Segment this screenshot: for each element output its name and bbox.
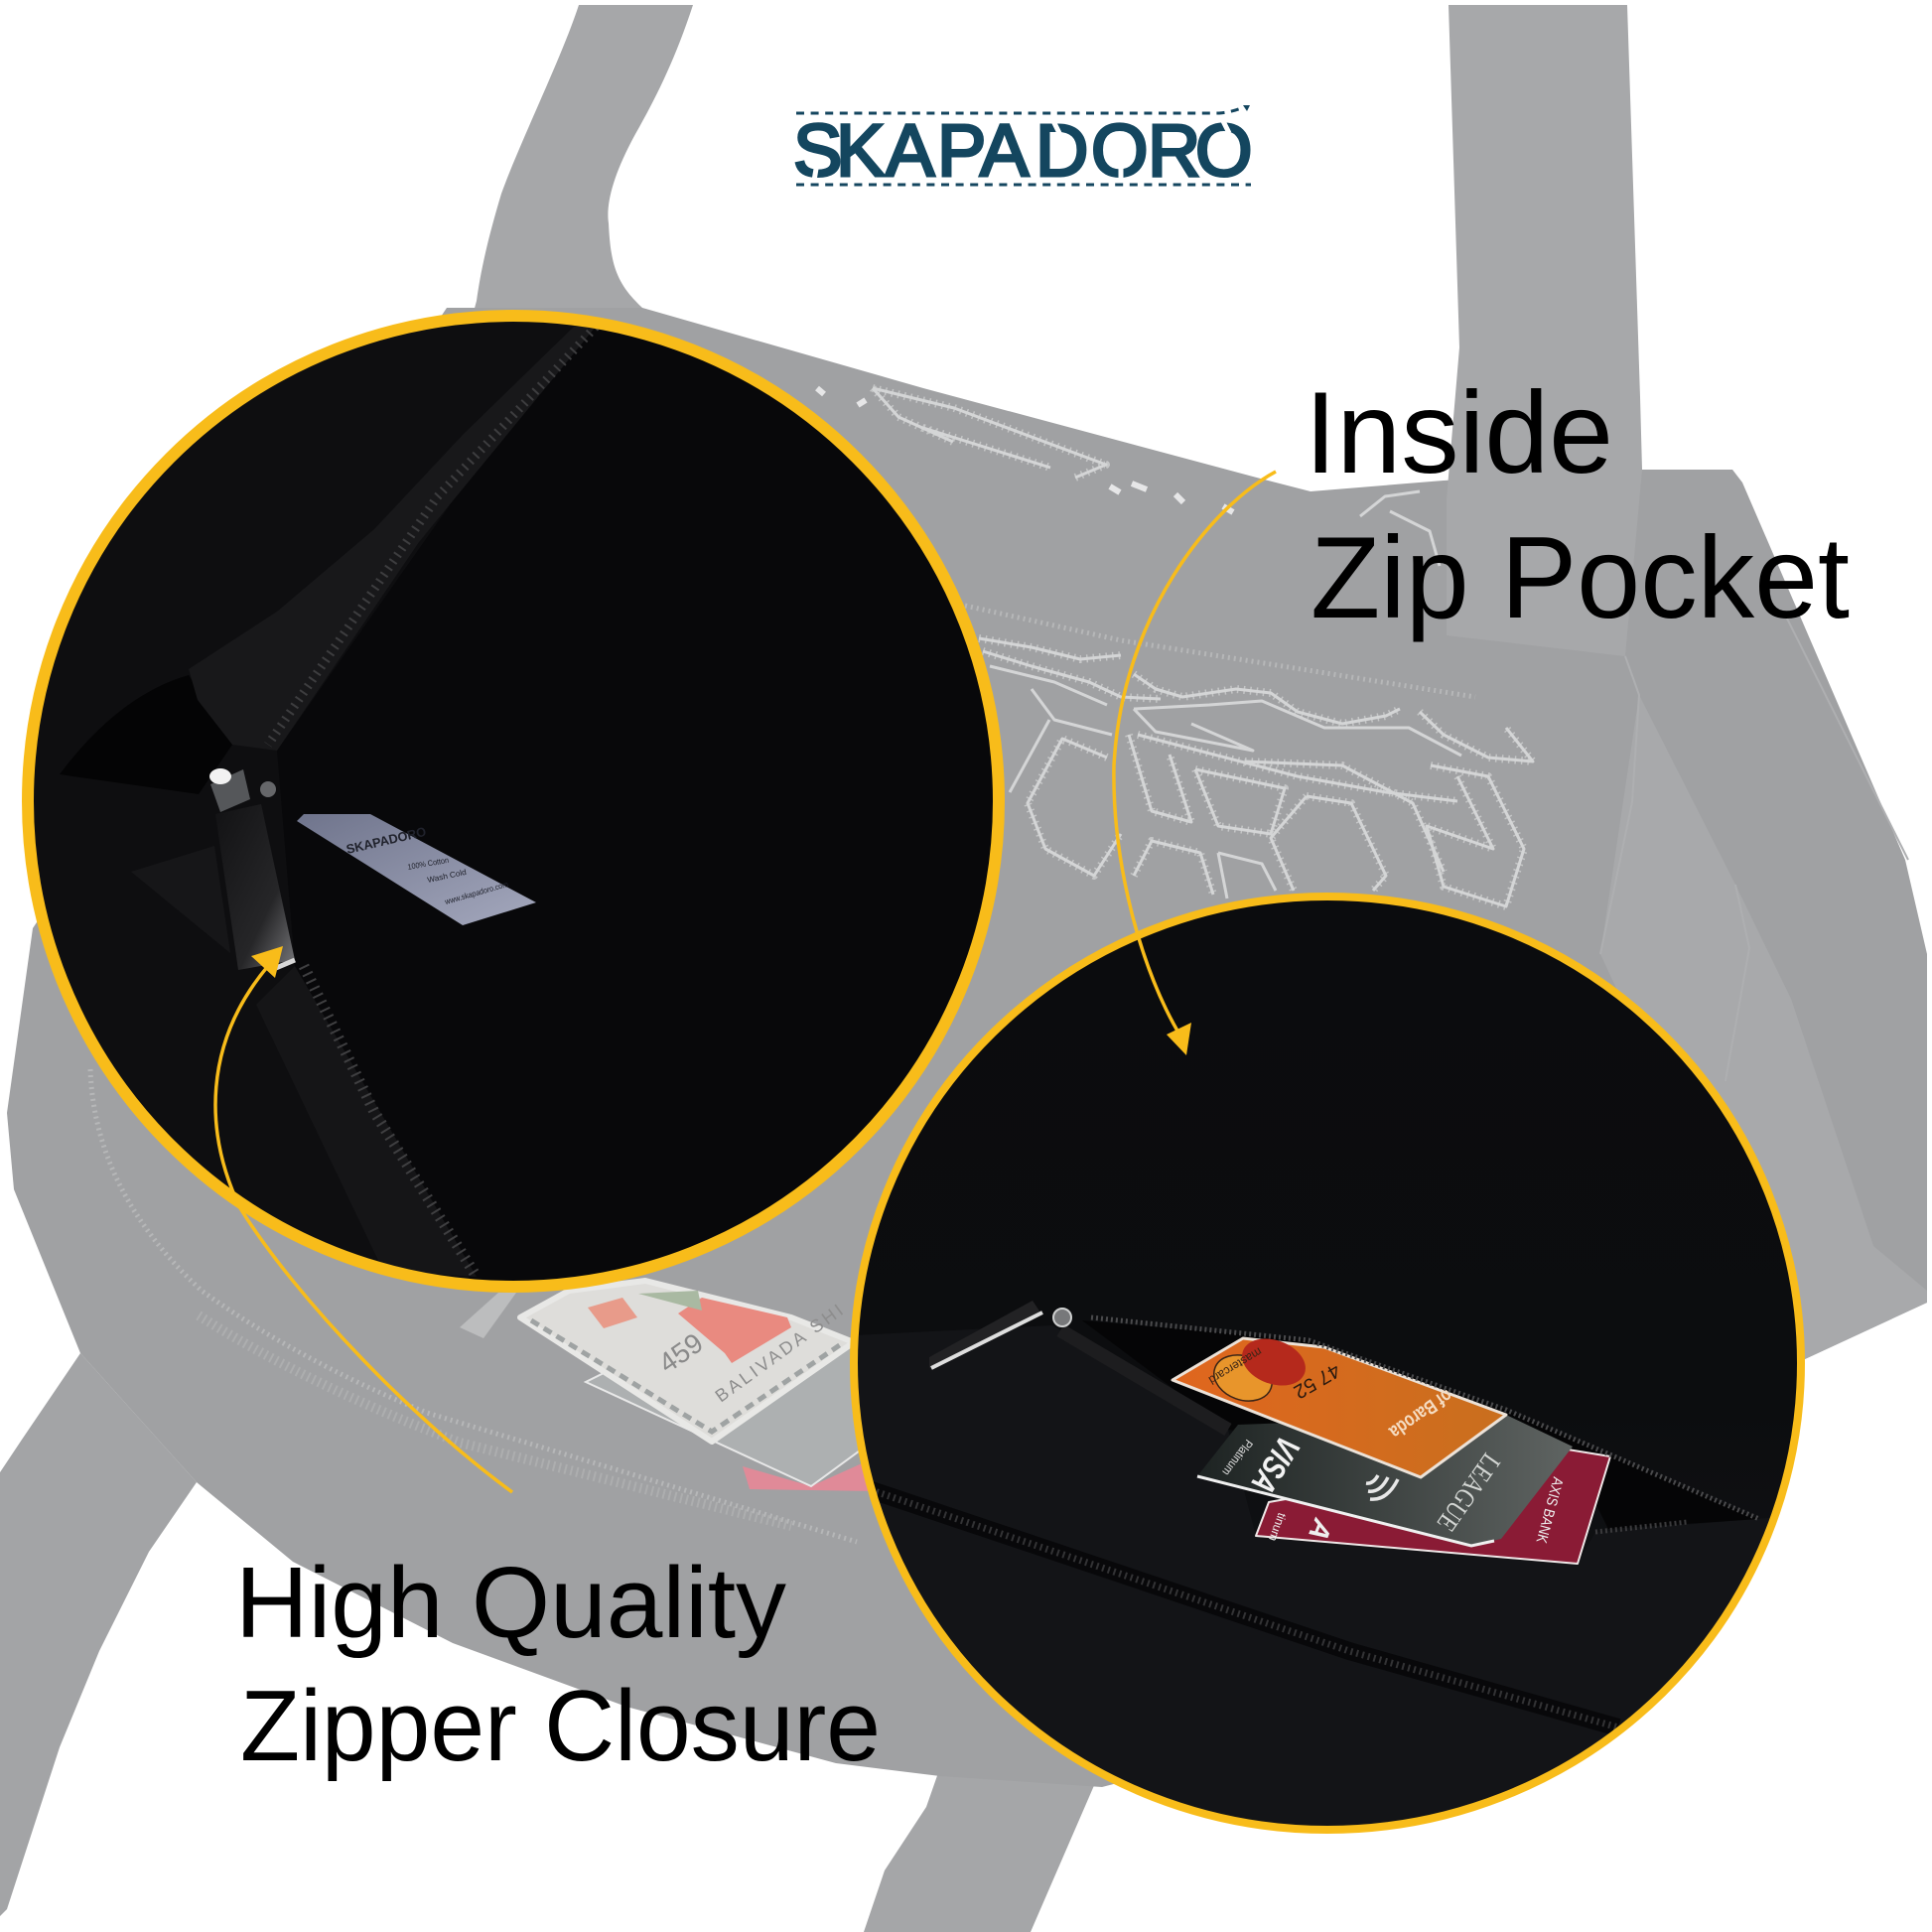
bank name: AXIS BANK — [1533, 1475, 1567, 1545]
top left strap — [467, 5, 693, 338]
lower zipper tape — [854, 1484, 1618, 1727]
lower pocket fabric — [858, 1326, 1168, 1404]
bag body — [7, 308, 1927, 1787]
mastercard orange circle — [1207, 1347, 1279, 1409]
pink card — [743, 1459, 874, 1491]
circle ring — [28, 316, 999, 1287]
zip puller — [215, 804, 295, 970]
card name: BALIVADA SHI — [712, 1299, 849, 1406]
slider shine — [209, 768, 231, 784]
right side panel — [1600, 695, 1927, 1359]
lower zipper teeth — [304, 966, 477, 1277]
bank name: of Baroda — [1385, 1384, 1456, 1444]
contactless icon — [1366, 1475, 1398, 1499]
upper zipper tape — [189, 327, 596, 751]
zipper slider — [209, 768, 276, 812]
card brand fragment: A — [1303, 1514, 1339, 1545]
card tier: Platinum — [1219, 1437, 1256, 1478]
stamp card — [520, 1281, 854, 1442]
bottom right strap — [864, 1767, 1102, 1932]
label wash text: Wash Cold — [427, 868, 468, 885]
fabric left of zipper — [20, 298, 596, 1291]
red card — [1256, 1449, 1610, 1564]
circle base — [28, 316, 999, 1287]
mastercard label: mastercard — [1206, 1344, 1265, 1387]
puller end highlight — [276, 960, 295, 968]
label: High Quality Zipper Closure — [235, 1548, 881, 1782]
logo wordmark: SKAPADORO — [793, 109, 1253, 192]
logo dashed bottom line — [796, 183, 1251, 187]
circle ring — [854, 897, 1801, 1830]
upper zipper teeth — [268, 327, 596, 745]
logo arrow tip — [1243, 105, 1250, 111]
care label — [297, 814, 536, 925]
card body — [1197, 1415, 1573, 1546]
card body — [1173, 1338, 1506, 1477]
bottom left strap — [0, 1353, 197, 1916]
washed-out zip puller — [460, 1293, 516, 1338]
webbing patch — [131, 846, 230, 953]
logo stencil cuts — [814, 119, 1229, 181]
puller ring — [1053, 1309, 1071, 1326]
label website: www.skapadoro.com — [443, 880, 509, 906]
embroidery cross stitches — [873, 388, 1533, 906]
arrow: inside zip pocket — [1114, 472, 1276, 1055]
League card — [1197, 1415, 1573, 1546]
puller dark body — [929, 1301, 1040, 1368]
label size text: 100% Cotton — [407, 856, 450, 872]
card bottom edge — [1197, 1476, 1494, 1546]
label brand: SKAPADORO — [345, 824, 428, 857]
green shawl — [638, 1291, 702, 1311]
scattered top stitches — [817, 388, 1233, 512]
handwritten number: 47 52 — [1290, 1359, 1344, 1403]
logo dashed top line — [796, 108, 1241, 113]
right strap — [1447, 5, 1642, 656]
washed-out cards — [520, 1281, 874, 1491]
label cloth — [297, 814, 536, 925]
card numbers: 459 — [653, 1327, 709, 1379]
slider body — [210, 769, 250, 812]
arrow: zipper closure — [215, 946, 512, 1492]
pocket opening — [1082, 1320, 1759, 1529]
puller shine — [931, 1312, 1042, 1368]
orange card — [1173, 1330, 1506, 1477]
mastercard red circle — [1235, 1330, 1312, 1394]
lower zipper teeth — [854, 1484, 1618, 1727]
pocket zipper tape — [1060, 1330, 1228, 1430]
upper zipper — [1091, 1317, 1759, 1519]
card brand: VISA — [1243, 1430, 1307, 1500]
fold and seam lines — [1600, 613, 1908, 1081]
stitched zipper lines on bag — [90, 606, 1475, 1542]
lower zipper tape — [298, 972, 477, 1277]
Zipper Closure text: Zipper Closure — [240, 1671, 881, 1782]
arrow head — [1167, 1023, 1191, 1055]
card body — [1256, 1449, 1610, 1564]
circle: inside zip pocket detail — [854, 897, 1817, 1847]
embroidered logo stitching — [817, 388, 1533, 906]
right zipper stub — [1595, 1522, 1688, 1532]
red dress — [678, 1298, 791, 1363]
card name: LEAGUE — [1431, 1448, 1506, 1537]
grey card — [586, 1342, 871, 1486]
pink shopping bag — [588, 1298, 637, 1328]
arrow head — [251, 946, 283, 978]
logo — [793, 105, 1253, 192]
circle base — [854, 897, 1801, 1830]
arrow line — [1114, 472, 1276, 1037]
shadow fold — [60, 675, 232, 794]
zip puller — [929, 1301, 1071, 1368]
Inside text: Inside — [1305, 367, 1613, 497]
slider knob — [260, 781, 276, 797]
arrow line — [215, 966, 512, 1492]
card stitching — [531, 1320, 844, 1432]
circle: zipper closure detail — [20, 298, 999, 1291]
Zip Pocket text: Zip Pocket — [1311, 512, 1850, 642]
label: Inside Zip Pocket — [1305, 367, 1850, 642]
tier fragment: tinum — [1266, 1511, 1289, 1543]
High Quality text: High Quality — [235, 1548, 787, 1659]
